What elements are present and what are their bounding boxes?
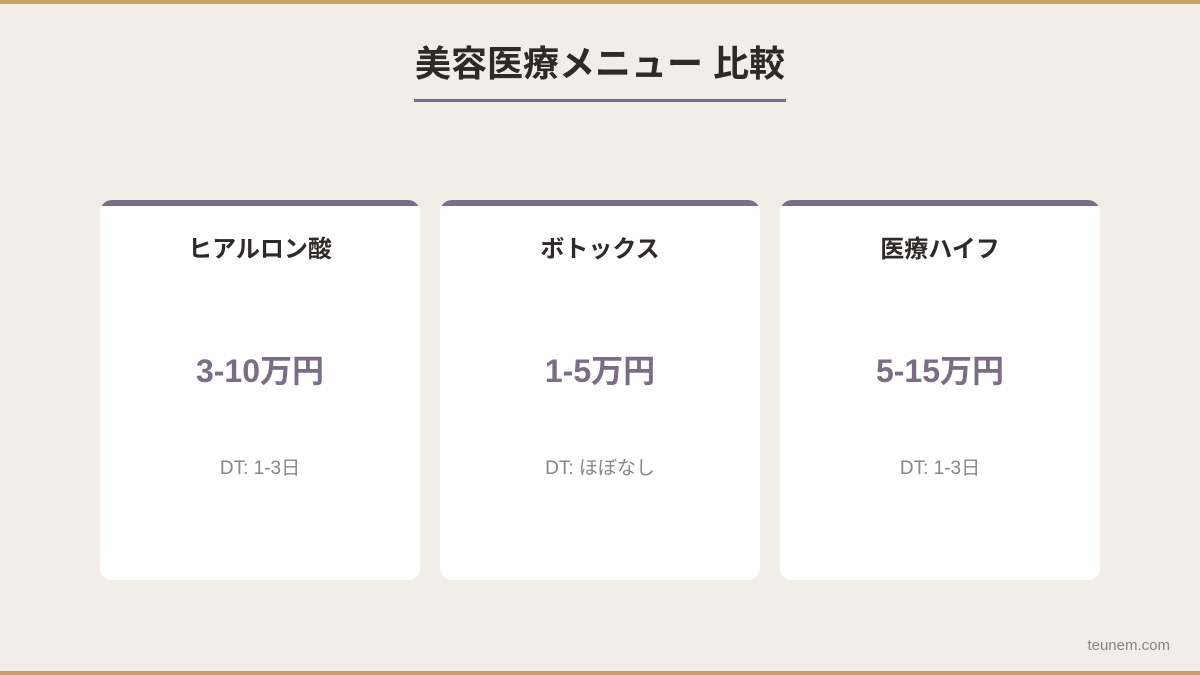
downtime: DT: ほぼなし (545, 458, 655, 479)
panel: hyaluronic acid (100, 200, 420, 580)
downtime: DT: 1-3日 (220, 458, 300, 479)
heading: ボトックス (540, 236, 660, 263)
panel: HIFU (780, 200, 1100, 580)
price: 3-10万円 (196, 353, 324, 389)
heading: 医療ハイフ (880, 236, 1000, 263)
title: 美容医療メニュー 比較 (415, 43, 785, 84)
panel: botox (440, 200, 760, 580)
heading: ヒアルロン酸 (188, 236, 332, 263)
downtime: DT: 1-3日 (900, 458, 980, 479)
footer credit: teunem.com (1087, 637, 1170, 654)
price: 1-5万円 (545, 353, 655, 389)
price: 5-15万円 (876, 353, 1004, 389)
